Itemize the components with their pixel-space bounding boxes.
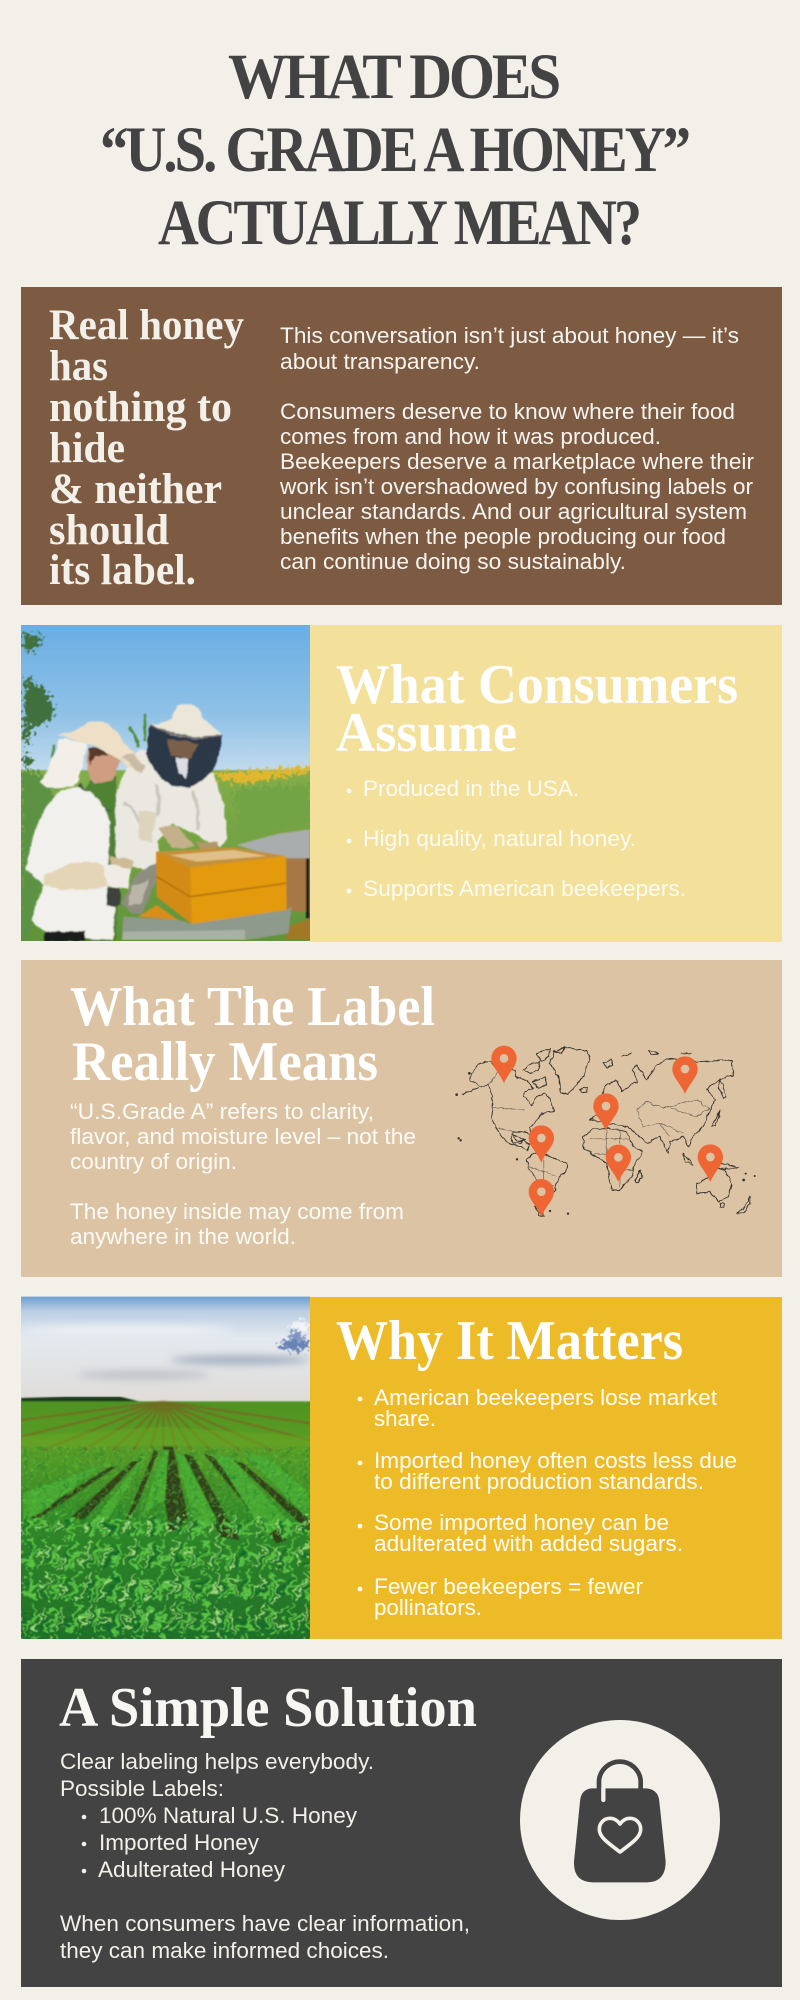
- text block: transparency message: can continue doing so sustainably.: [280, 549, 626, 574]
- heading: real honey has nothing to hide: should: [49, 507, 169, 554]
- text block: clear labeling and possible labels: When consumers have clear information,: [60, 1911, 470, 1936]
- heading: a simple solution: A Simple Solution: [59, 1677, 477, 1739]
- heading: real honey has nothing to hide: has: [49, 343, 108, 390]
- heading: real honey has nothing to hide: nothing to: [49, 384, 232, 431]
- panel: transparency: [21, 287, 782, 605]
- heading: real honey has nothing to hide: & neither: [49, 466, 222, 513]
- title: ACTUALLY MEAN?: [158, 187, 639, 259]
- icon: map pin: [698, 1144, 723, 1182]
- text block: transparency message: unclear standards. And our agricultural system: [280, 499, 747, 524]
- bullet list: reasons it matters: to different production standards.: [374, 1469, 704, 1494]
- heading: why it matters: Why It Matters: [336, 1310, 683, 1372]
- text block: transparency message: [279, 323, 755, 574]
- bullet list: reasons it matters: Some imported honey can be: [374, 1510, 669, 1535]
- text block: transparency message: benefits when the people producing our food: [280, 524, 726, 549]
- bullet list: consumer assumptions: Produced in the USA.: [363, 776, 579, 801]
- bullet list: reasons it matters: pollinators.: [374, 1595, 482, 1620]
- icon: map pin: [606, 1145, 631, 1182]
- text block: transparency message: Consumers deserve to know where their food: [280, 399, 735, 424]
- bullet list: reasons it matters: adulterated with added sugars.: [374, 1531, 683, 1556]
- heading: what the label really means: What The Label: [70, 976, 435, 1038]
- text block: label explanation: [70, 1099, 416, 1249]
- bullet list: reasons it matters: share.: [374, 1406, 436, 1431]
- text block: clear labeling and possible labels: Imported Honey: [99, 1830, 260, 1855]
- icon: shopping bag with heart in circle: [520, 1720, 720, 1920]
- chart: world map with pins: [455, 1046, 756, 1217]
- text block: transparency message: about transparency.: [280, 349, 480, 374]
- bullet list: reasons it matters: Fewer beekeepers = fewer: [374, 1574, 644, 1599]
- icon: map pin: [529, 1125, 554, 1163]
- bullet list: reasons it matters: Imported honey often costs less due: [374, 1448, 737, 1473]
- text block: label explanation: anywhere in the world.: [70, 1224, 296, 1249]
- heading: real honey has nothing to hide: its label.: [49, 547, 196, 594]
- text block: transparency message: Beekeepers deserve a marketplace where their: [280, 449, 755, 474]
- panel: a simple solution: [21, 1659, 782, 1987]
- text block: label explanation: The honey inside may come from: [70, 1199, 404, 1224]
- heading: what consumers assume: [336, 654, 738, 764]
- text block: transparency message: comes from and how it was produced.: [280, 424, 661, 449]
- photo: corn field under cloudy sky: [21, 1296, 310, 1639]
- text block: transparency message: This conversation isn’t just about honey — it’s: [280, 323, 739, 348]
- bullet list: reasons it matters: [358, 1385, 737, 1620]
- icon: map pin: [529, 1179, 554, 1217]
- text block: label explanation: flavor, and moisture level – not the: [70, 1124, 416, 1149]
- heading: real honey has nothing to hide: Real honey: [49, 302, 244, 349]
- text block: clear labeling and possible labels: [60, 1749, 470, 1963]
- heading: what the label really means: Really Means: [72, 1031, 378, 1093]
- text block: clear labeling and possible labels: 100% Natural U.S. Honey: [99, 1803, 358, 1828]
- text block: label explanation: “U.S.Grade A” refers to clarity,: [70, 1099, 374, 1124]
- bullet list: consumer assumptions: High quality, natural honey.: [363, 826, 636, 851]
- panel: what consumers assume: [310, 625, 782, 942]
- panel: why it matters: [310, 1297, 782, 1639]
- title: WHAT DOES: [228, 41, 559, 113]
- heading: what consumers assume: What Consumers: [336, 654, 738, 716]
- text block: label explanation: country of origin.: [70, 1149, 237, 1174]
- icon: map pin: [491, 1046, 517, 1083]
- text block: clear labeling and possible labels: Clear labeling helps everybody.: [60, 1749, 374, 1774]
- heading: real honey has nothing to hide: [49, 302, 244, 594]
- bullet list: consumer assumptions: Supports American beekeepers.: [363, 876, 686, 901]
- title: [100, 41, 689, 259]
- bullet list: reasons it matters: American beekeepers lose market: [374, 1385, 718, 1410]
- title: “U.S. GRADE A HONEY”: [100, 114, 689, 186]
- icon: map pin: [593, 1093, 619, 1131]
- text block: transparency message: work isn’t overshadowed by confusing labels or: [279, 474, 754, 499]
- icon: map pin: [672, 1056, 698, 1094]
- heading: what the label really means: [70, 976, 435, 1093]
- text block: clear labeling and possible labels: they can make informed choices.: [60, 1938, 389, 1963]
- heading: real honey has nothing to hide: hide: [49, 425, 125, 472]
- panel: what the label really means: [21, 960, 782, 1277]
- heading: what consumers assume: Assume: [336, 702, 517, 764]
- text block: clear labeling and possible labels: Possible Labels:: [60, 1776, 224, 1801]
- text block: clear labeling and possible labels: Adulterated Honey: [98, 1857, 286, 1882]
- photo: beekeepers at a hive: [17, 620, 317, 947]
- bullet list: consumer assumptions: [347, 776, 686, 901]
